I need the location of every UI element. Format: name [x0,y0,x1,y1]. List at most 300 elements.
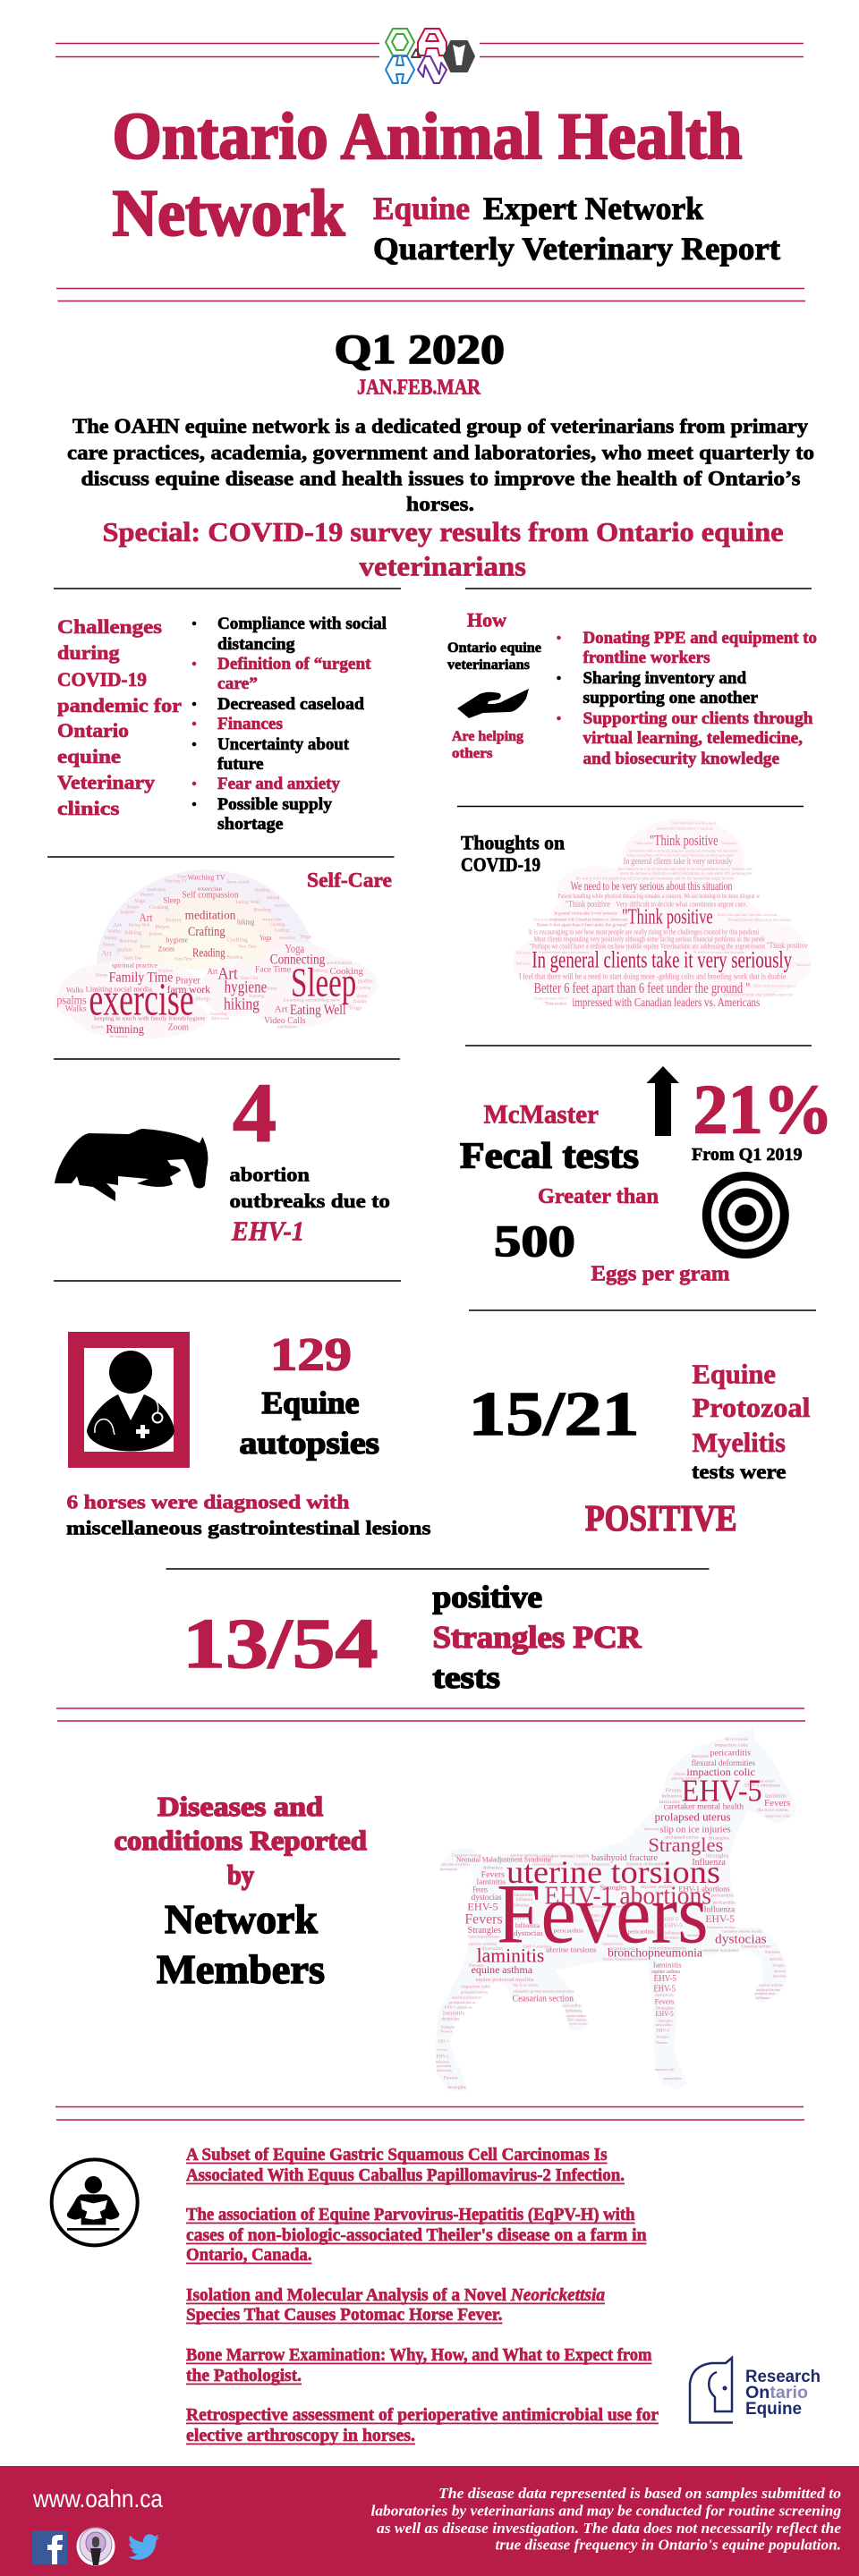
word cloud: thoughts: Better 6 feet apart than 6 feet under the ground [718,912,777,917]
word cloud: horse of reported diseases: uterine torsions [441,1861,471,1866]
text: positive Strangles PCR tests: tests [433,1660,500,1695]
word cloud: horse of reported diseases: basihyoid fracture [452,1995,481,1999]
title: Network [113,177,345,250]
text: greater than: Greater than [538,1185,659,1208]
word cloud: thoughts: I feel that there will be a need to start doing more -gelding colts and breeding work that is doable [519,971,786,981]
word cloud: self-care rainbow and clouds: psalms [358,979,373,984]
word cloud: self-care rainbow and clouds [55,869,378,1039]
text: EHV-1: EHV-1 [231,1215,304,1247]
word cloud: thoughts: Better 6 feet apart than 6 feet under the ground " [534,979,750,996]
word cloud: self-care rainbow and clouds: hiking [237,918,254,926]
word cloud: thoughts: I feel that there will be a need [671,822,716,826]
word cloud: horse of reported diseases: dystocias [439,1867,458,1871]
heading: thoughts: COVID-19 [461,853,540,876]
text: are helping others [452,729,523,761]
word cloud: horse of reported diseases: Strangles [656,2035,669,2038]
word cloud: thoughts: "Think positive [566,900,610,910]
text: Ontario equine veterinarians [447,640,541,673]
panel: challenges [57,614,387,834]
panel: thoughts on COVID-19 [461,818,812,1011]
word cloud: horse of reported diseases: Fevers [656,2040,668,2045]
word cloud: horse of reported diseases: Influenza [515,1921,540,1929]
word cloud: horse of reported diseases: laminitis [515,1894,532,1898]
word cloud: self-care rainbow and clouds: Yoga [134,898,145,904]
word cloud: thoughts: "Think positive [532,917,550,921]
word cloud: horse of reported diseases: equine asthma [472,1965,532,1976]
word cloud: horse of reported diseases: Fevers [764,1799,790,1809]
panel: EHV-1 abortion outbreaks [55,1066,390,1247]
heading: challenges: COVID-19 [57,668,147,691]
arrow: up [646,1066,679,1136]
citation: bone marrow: the Pathologist. [186,2366,302,2385]
word cloud: horse of reported diseases: laminitis [443,2011,465,2016]
word cloud: self-care rainbow and clouds: hygiene [187,1017,206,1022]
word cloud: horse of reported diseases: basihyoid fracture [756,1988,780,1992]
word cloud: self-care rainbow and clouds: exercise [198,885,222,893]
word cloud: horse of reported diseases: flexural deformities [626,1862,667,1867]
word cloud: self-care rainbow and clouds: Art [101,949,113,957]
word cloud: horse of reported diseases: pericarditis [664,2076,682,2080]
word cloud: horse of reported diseases: EHV-5 [682,1774,762,1808]
icon: podcast [77,2528,115,2565]
text: disclaimer [370,2485,842,2553]
word cloud: self-care rainbow and clouds: meditation [277,1025,297,1030]
text: McMaster: McMaster [483,1100,599,1129]
word cloud: self-care rainbow and clouds: Cooking [149,905,168,911]
word cloud: horse of reported diseases: laminitis [477,1877,506,1886]
word cloud: thoughts: "Think positive [650,832,719,849]
citation: bone marrow: Bone Marrow Examination: Why, How, and What to Expect from [186,2345,652,2365]
word cloud: horse of reported diseases: prolapsed uterus [655,1811,731,1824]
panel: McMaster fecal tests [460,1066,833,1286]
word cloud: horse of reported diseases: pericarditis [710,1750,751,1758]
word cloud: horse of reported diseases: laminitis [659,1800,680,1805]
word cloud: horse of reported diseases: uterine torsions [702,1949,739,1953]
word cloud: horse of reported diseases: flexural deformities [692,1758,755,1768]
citation: Equine Parvovirus-Hepatitis: Ontario, Canada. [186,2245,311,2265]
word cloud: horse of reported diseases: slip on ice injuries [757,1809,788,1813]
word cloud: self-care rainbow and clouds: hiking [105,936,117,941]
citation: Neorickettsia: Species That Causes Potomac Horse Fever. [186,2305,503,2325]
word cloud: thoughts: Very difficult to decide what constitutes urgent care. [616,899,747,908]
word cloud: self-care rainbow and clouds: Watching TV [187,873,225,881]
word cloud: horse of reported diseases: prolapsed uterus [754,1992,776,1996]
word cloud: horse of reported diseases: Influenza [704,1905,736,1915]
word cloud: horse of reported diseases: EHV-5 [665,1918,678,1923]
word cloud: horse of reported diseases: caretaker mental health [540,1855,590,1860]
text: positive Strangles PCR tests [433,1580,642,1695]
word cloud: horse of reported diseases: uterine torsions [546,1945,597,1954]
word cloud: self-care rainbow and clouds: hiking [313,970,328,974]
word cloud: horse of reported diseases: EHV-5 [515,1916,529,1921]
heading: diseases and conditions reported: Members [157,1946,325,1992]
word cloud: horse of reported diseases: dystocias [441,2017,460,2021]
word cloud: horse of reported diseases: impaction colic [655,1994,675,1997]
stat: 21 percent: 21% [693,1070,833,1148]
text: positive Strangles PCR tests: positive [433,1580,542,1614]
word cloud: horse of reported diseases: Strangles [648,1834,723,1856]
word cloud: self-care rainbow and clouds: Zoom [177,876,187,880]
subtitle: Expert Network [483,191,703,226]
word cloud: horse of reported diseases: bronchopneumonia [649,1946,687,1951]
list: how: virtual learning, telemedicine, [583,729,803,748]
logo: Research Ontario Equine: Equine [745,2400,802,2419]
intro paragraph: The OAHN equine network is a dedicated group of veterinarians from primary [72,415,809,437]
word cloud: self-care rainbow and clouds: Prayer [175,975,200,986]
word cloud: horse of reported diseases: dystocias [481,1947,503,1952]
word cloud: horse of reported diseases: laminitis [653,1960,682,1969]
word cloud: horse of reported diseases: slip on ice injuries [725,1737,748,1741]
word cloud: horse of reported diseases: Influenza [436,2060,449,2064]
word cloud: self-care rainbow and clouds: Running [249,995,265,999]
word cloud: self-care rainbow and clouds: Sleep [195,996,209,1002]
word cloud: horse of reported diseases: pericarditis [713,1901,736,1905]
word cloud: horse of reported diseases: Influenza [665,1931,681,1936]
word cloud: horse of reported diseases: Fevers [481,1871,505,1880]
word cloud: horse of reported diseases: Fevers [765,1951,780,1955]
word cloud: horse of reported diseases: Fevers [440,2029,453,2034]
icon: helping hand [457,689,529,718]
word cloud: horse of reported diseases: basihyoid fracture [591,1853,659,1863]
special heading [102,516,784,581]
text: Fecal tests: Fecal tests [460,1134,639,1175]
word cloud: thoughts: Patient handling while physical distancing remains a concern. We are learning to be more diligent w [557,892,761,900]
word cloud: self-care rainbow and clouds: Walks [66,986,83,994]
text: are helping others: Are helping [452,729,523,744]
heading: diseases and conditions reported: conditions Reported [115,1825,367,1856]
word cloud: horse of reported diseases: EHV-5 [665,1922,683,1928]
word cloud: horse of reported diseases: Strangles [705,1854,729,1860]
word cloud: horse of reported diseases: Fevers [497,1867,709,1962]
intro paragraph: horses. [406,493,474,515]
word cloud: thoughts: Difficult to decide what constitutes urgent care. [753,983,796,987]
word cloud: horse of reported diseases: equine protozoal myelitis [476,1978,534,1983]
word cloud: horse of reported diseases: Fevers [469,1963,484,1969]
word cloud: horse of reported diseases: Strangles [709,1836,729,1842]
word cloud: horse of reported diseases: equine asthma [651,1970,680,1975]
word cloud: self-care rainbow and clouds: Crafting [226,937,248,944]
word cloud: thoughts: Know the decrease in clients able to afford veterinarians, in a area where 50% are losing jobs [620,872,752,877]
word cloud: horse of reported diseases: uterine torsions [671,1775,700,1780]
list: challenges: Compliance with social [217,614,387,633]
panel: how veterinarians help [447,608,817,768]
text: disclaimer: The disease data represented is based on samples submitted to [438,2485,841,2502]
word cloud: horse of reported diseases: Influenza [674,1772,686,1776]
word cloud: self-care rainbow and clouds: Art [140,911,153,924]
word cloud: self-care rainbow and clouds: Video Calls [240,977,258,981]
citation: gastric carcinomas: Associated With Equus Caballus Papillomavirus-2 Infection. [186,2165,625,2185]
word cloud: horse of reported diseases: Fevers [444,2076,458,2081]
word cloud: horse of reported diseases: idiopathic granulomatous pneumonia [579,1904,626,1909]
word cloud: horse of reported diseases: EHV-1 [591,1913,604,1919]
word cloud: horse of reported diseases: EHV-5 [467,1901,498,1913]
word cloud: horse of reported diseases [436,1728,796,2091]
word cloud: self-care rainbow and clouds: farm work [226,880,250,885]
word cloud: horse of reported diseases: equine asthma [468,1941,497,1945]
word cloud: thoughts: "Think positive [515,961,531,965]
word cloud: horse of reported diseases: uterine torsions [510,1852,539,1857]
heading: quarter: JAN.FEB.MAR [357,376,481,399]
list: challenges: future [217,755,263,774]
word cloud: horse of reported diseases: Strangles [656,2007,674,2012]
word cloud: horse of reported diseases: dystocias [514,1928,543,1937]
word cloud: self-care rainbow and clouds: psalms [56,995,87,1008]
word cloud: self-care rainbow and clouds: Reading [192,945,225,959]
list: how: Sharing inventory and [583,669,746,688]
word cloud: self-care rainbow and clouds: meditation [275,902,290,907]
citation: antimicrobial use [186,2405,659,2445]
word cloud: thoughts: "Think positive [795,962,810,967]
text: POSITIVE: POSITIVE [585,1497,737,1538]
word cloud: thoughts: There seems to be a lot of confusion and variety in the interpretation to what is "essential care" [617,868,753,872]
word cloud: self-care rainbow and clouds: Self compassion [182,890,239,900]
stat: 500: 500 [494,1216,575,1266]
word cloud: horse of reported diseases: EHV-1 abortions [445,2005,472,2010]
icon: person reading [52,2159,138,2245]
list: challenges: Possible supply [217,795,333,814]
word cloud: horse of reported diseases: laminitis [687,1933,702,1937]
list: challenges: Definition of “urgent [217,655,371,674]
word cloud: self-care rainbow and clouds: Zoom [168,1023,190,1033]
word cloud: self-care rainbow and clouds: hiking [267,896,280,901]
word cloud: thoughts: "Think positive [720,841,736,845]
word cloud: horse of reported diseases: equine asthma [566,2014,586,2018]
word cloud: horse of reported diseases: Ceasarian section [513,1994,574,2004]
logo: Research Ontario Equine: Research [745,2368,821,2386]
list: how: Supporting our clients through [583,709,813,728]
word cloud: horse of reported diseases: Neonatal Maladjustment Syndrome [456,1856,552,1864]
text: gastrointestinal lesions: miscellaneous gastrointestinal lesions [66,1517,431,1538]
word cloud: self-care rainbow and clouds: Video Calls [264,1016,306,1026]
heading: challenges: clinics [57,797,120,819]
word cloud: self-care rainbow and clouds: Sleep [96,974,108,979]
word cloud: thoughts: It is encouraging to see how most people are really rising to the challenges created by this pandemi [529,928,760,936]
text: abortion outbreaks: outbreaks due to [229,1190,390,1212]
word cloud: self-care rainbow and clouds: Walks [65,1005,87,1014]
word cloud: self-care rainbow and clouds: hygiene [121,911,134,915]
text: abortion outbreaks [229,1163,390,1212]
word cloud: thoughts: "Think positive [515,951,531,955]
icon: twitter [128,2534,159,2560]
word cloud: horse of reported diseases: impaction colic [655,2068,675,2072]
citation: Neorickettsia: Isolation and Molecular Analysis of a Novel Neorickettsia [186,2285,605,2305]
word cloud: horse of reported diseases: Strangles [600,1883,627,1891]
word cloud: thoughts: "Think positive [767,942,808,951]
word cloud: horse of reported diseases: bronchopneumonia [468,1935,500,1939]
heading: challenges: during [57,641,120,664]
word cloud: self-care rainbow and clouds: Family Time [123,957,142,962]
logo: Research Ontario Equine: Ontario [745,2384,808,2402]
heading: thoughts: Thoughts on [461,832,565,853]
heading: self-care: Self-Care [307,869,392,891]
word cloud: horse of reported diseases: bronchopneumonia [608,1946,702,1960]
word cloud: horse of reported diseases: EHV-1 [437,2055,449,2060]
word cloud: thoughts: In general clients take it very seriously [624,857,732,867]
word cloud: horse of reported diseases: Fevers [472,1886,488,1895]
word cloud: horse of reported diseases: impaction colic [461,1986,490,1990]
intro paragraph: discuss equine disease and health issues to improve the health of Ontario’s [81,467,801,490]
stat: 129: 129 [270,1329,352,1381]
word cloud: self-care rainbow and clouds: Eating Well [290,1003,346,1018]
word cloud: self-care rainbow and clouds: Crafting [357,986,371,990]
word cloud: horse of reported diseases: laminitis [692,1755,709,1759]
text: Equine autopsies: autopsies [240,1426,379,1461]
word cloud: self-care rainbow and clouds: hygiene [225,978,267,996]
word cloud: horse of reported diseases: Strangles [658,2019,673,2023]
word cloud: self-care rainbow and clouds: Art [113,922,122,928]
word cloud: horse of reported diseases: Ceasarian section [741,1945,771,1950]
word cloud: horse of reported diseases: EHV-1 abortions [744,1784,780,1789]
word cloud: horse of reported diseases: Strangles [468,1926,501,1936]
word cloud: self-care rainbow and clouds: Connecting [210,1013,227,1017]
word cloud: horse of reported diseases: flexural deformities [532,1862,566,1867]
word cloud: self-care rainbow and clouds: psalms [149,932,163,936]
heading: challenges: Veterinary [57,771,155,793]
icon: OAHN logo [386,29,474,83]
word cloud: horse of reported diseases: pericarditis [628,1928,655,1935]
word cloud: thoughts: We need to be very serious about this situation [727,919,791,923]
heading: diseases and conditions reported: Diseases and [157,1791,323,1822]
word cloud: thoughts: We need to be very serious about this situation [693,950,744,954]
word cloud: thoughts: "Think positive [634,841,653,845]
subtitle: Equine [373,191,470,226]
word cloud: horse of reported diseases: idiopathic granulomatous pneumonia [513,1989,574,1994]
word cloud: horse of reported diseases: Influenza [566,2009,583,2013]
citation: bone marrow [186,2345,652,2385]
list: challenges: distancing [217,635,295,654]
word cloud: horse of reported diseases: Strangles [440,2024,455,2029]
word cloud: self-care rainbow and clouds: Sleep [291,959,356,1004]
word cloud: horse of reported diseases: laminitis [477,1944,544,1966]
word cloud: thoughts: My worry is for the people that will lose jobs and businesses and for the horses that might be ours [575,875,734,881]
word cloud: self-care rainbow and clouds: hygiene [158,970,174,974]
word cloud: self-care rainbow and clouds: keeping in touch with family friends [94,1016,187,1022]
word cloud: horse of reported diseases: slip on ice injuries [659,1825,731,1835]
horse silhouette [436,1728,796,2091]
word cloud: thoughts: Better 6 feet apart than 6 feet under the ground" [537,922,628,928]
word cloud: horse of reported diseases: caretaker mental health [664,1803,744,1812]
word cloud: horse of reported diseases: laminitis [773,1974,787,1979]
word cloud: self-care rainbow and clouds: Zoom [91,1024,105,1030]
stat: 13/54: 13/54 [183,1606,378,1683]
word cloud: self-care rainbow and clouds: meditation [148,888,166,893]
word cloud: horse of reported diseases: Strangles [447,2086,466,2090]
word cloud: horse of reported diseases: Neonatal Maladjustment Syndrome [602,1957,648,1962]
word cloud: self-care rainbow and clouds: Yoga [348,1006,362,1012]
word cloud: thoughts: We need to be very serious about this situation [571,880,732,894]
intro paragraph [67,415,814,515]
word cloud: thoughts: impressed with Canadian leaders vs. Americans [656,826,713,831]
word cloud: horse of reported diseases: prolapsed uterus [449,2000,476,2004]
word cloud: self-care rainbow and clouds: Walks [112,1025,125,1030]
word cloud: horse of reported diseases: Fevers [655,1997,675,2006]
word cloud: horse of reported diseases: pericarditis [711,1894,734,1899]
word cloud: horse of reported diseases: dystocias [472,1894,502,1902]
word cloud: thoughts: "Perhaps we could have a rethink on how mobile equine Veterinarians are addressing the urgent/essent [530,943,766,951]
word cloud: self-care rainbow and clouds: spiritual practice [112,961,157,969]
list: how: supporting one another [583,689,759,708]
list: how: Donating PPE and equipment to [583,629,817,648]
word cloud: horse of reported diseases: dystocias [774,1970,787,1973]
word cloud: horse of reported diseases: Influenza [661,1792,683,1799]
word cloud: self-care rainbow and clouds: Prayer [140,945,151,949]
special heading: Special: COVID-19 survey results from Ontario equine [102,516,784,547]
word cloud: horse of reported diseases: uterine torsions [506,1854,720,1890]
word cloud: self-care rainbow and clouds: Crafting [188,925,225,939]
word cloud: horse of reported diseases: EHV-1 abortions [523,1944,552,1948]
word cloud: thoughts: impressed with Canadian leaders vs. Americans [550,917,628,922]
word cloud: horse of reported diseases: dystocias [437,2068,453,2072]
word cloud: horse of reported diseases: EHV-1 abortions [544,1882,711,1910]
word cloud: horse of reported diseases: dystocias [437,2047,448,2051]
word cloud: self-care rainbow and clouds: Zoom [158,944,174,953]
panel: equine protozoal myelitis [469,1358,811,1538]
word cloud: horse of reported diseases: EHV-1 [656,2029,670,2034]
heading: challenges [57,615,182,819]
panel: strangles PCR [183,1580,642,1695]
word cloud: horse of reported diseases: Influenza [756,1996,770,2000]
word cloud: self-care rainbow and clouds: hiking [125,931,141,936]
word cloud: thoughts: "Think positive [622,906,713,929]
citation: Equine Parvovirus-Hepatitis [186,2205,646,2265]
word cloud: horse of reported diseases: Fevers [607,1935,618,1939]
word cloud: horse of reported diseases: Ceasarian section [452,1853,482,1858]
word cloud: horse of reported diseases: Ceasarian section [707,1925,736,1929]
word cloud: horse of reported diseases: slip on ice injuries [513,1983,539,1987]
word cloud: self-care rainbow and clouds: Face Time [239,945,257,949]
word cloud: thoughts: Perhaps we could have a rethink on how mobile equine Veterinarians are addressing the urgent [626,852,735,857]
word cloud: horse of reported diseases: EHV-5 [705,1914,735,1925]
icon: facebook [32,2530,67,2564]
text: Equine Protozoal Myelitis: Myelitis [693,1427,786,1458]
word cloud: thoughts [513,818,812,1011]
text: are helping others: others [452,746,492,761]
word cloud: horse of reported diseases: uterine torsions [569,2021,588,2025]
word cloud: thoughts: Most clients responding very positively although some facing serious financial problems as the pande [534,936,765,944]
word cloud: self-care rainbow and clouds: Face Time [174,957,193,962]
word cloud: self-care rainbow and clouds: Prayer [155,925,170,930]
word cloud: self-care rainbow and clouds: Watching TV [165,880,188,885]
word cloud: horse of reported diseases: Fevers [665,1788,682,1793]
heading: challenges: Ontario [57,719,129,741]
word cloud: horse of reported diseases: EHV-5 [656,2010,674,2018]
word cloud: self-care rainbow and clouds: farm work [211,1017,230,1021]
list: challenges: care” [217,674,258,693]
word cloud: thoughts: In general clients take it very seriously [539,950,590,954]
word cloud: self-care rainbow and clouds: exercise [262,917,283,922]
word cloud: self-care rainbow and clouds: Eating Well [129,924,150,928]
word cloud: horse of reported diseases: prolapsed uterus [461,1989,488,1994]
text: website: www.oahn.ca [32,2485,163,2512]
list: challenges: Fear and anxiety [217,775,340,793]
word cloud: self-care rainbow and clouds: Crafting [275,929,290,934]
word cloud: horse of reported diseases: dystocias [644,1826,659,1831]
word cloud: horse of reported diseases: Influenza [516,1898,532,1902]
special heading: veterinarians [360,551,526,581]
list: challenges: Uncertainty about [217,735,350,754]
citation: Neorickettsia [186,2285,605,2325]
word cloud: horse of reported diseases: basihyoid fracture [602,1941,624,1945]
heading: challenges: pandemic for [57,694,182,716]
title [113,100,743,250]
word cloud: self-care rainbow and clouds: exercise [279,936,296,941]
word cloud: self-care rainbow and clouds: Yoga [285,943,305,956]
word cloud: self-care rainbow and clouds: Prayer [140,894,154,898]
panel: self-care [55,869,392,1039]
word cloud: self-care rainbow and clouds: Sleep [102,942,115,947]
text: Equine Protozoal Myelitis [693,1358,811,1458]
word cloud: horse of reported diseases: laminitis [770,1957,783,1962]
